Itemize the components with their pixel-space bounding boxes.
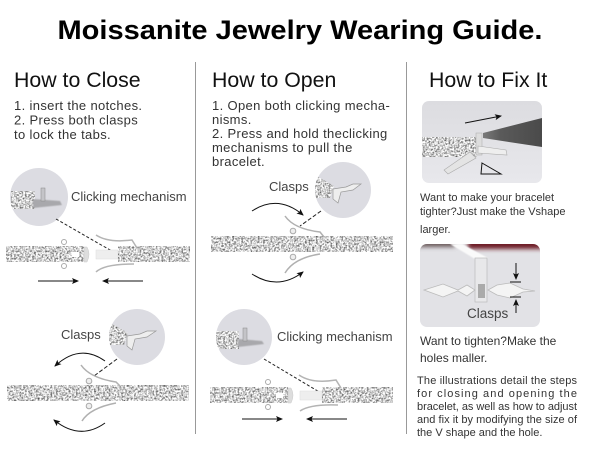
arrow: up [515,300,517,313]
text block: tighter instruction: tighter?Just make the Vshape [420,206,566,218]
text block: opening steps: nisms. [212,112,252,127]
bracelet: open bottom [210,375,393,411]
text block: opening steps: bracelet. [212,154,265,169]
text block: tighter instruction: larger. [420,224,451,236]
icon: clicking mechanism detail circle [10,168,68,226]
label: clasps: Clasps [269,179,309,194]
label: clasps: Clasps [467,306,509,321]
text block: tighter instruction: Want to make your bracelet [420,192,554,204]
text block: illustration note: bracelet, as well as how to adjust [417,401,577,413]
text block: opening steps: 1. Open both clicking mecha- [212,98,390,113]
leader line [264,359,321,393]
arrow: left [307,418,347,420]
icon: clasp detail circle [109,309,165,365]
label: clicking mechanism: Clicking mechanism [71,189,187,204]
text block: closing steps: to lock the tabs. [14,127,111,142]
text block: illustration note: for closing and opening the [417,388,577,400]
leader line [94,359,117,376]
panel: how to close [6,68,190,431]
photo: pliers bending clasp [422,101,542,183]
label: clicking mechanism: Clicking mechanism [277,329,393,344]
column divider 1 [195,62,196,434]
heading: how to close: How to Close [14,68,141,92]
arrow: upper curve [252,203,303,215]
leader line [300,211,321,226]
icon: clicking mechanism detail circle [216,309,272,365]
arrow: right [38,280,78,282]
text block: opening steps: mechanisms to pull the [212,140,353,155]
text block: illustration note: and fix it by modifying the size of [417,414,578,426]
photo: clasp holes [420,244,540,327]
text block: closing steps: 2. Press both clasps [14,112,138,128]
arrow: right [242,418,282,420]
text block: opening steps: 2. Press and hold theclicking [212,126,388,141]
heading: how to open: How to Open [212,68,336,92]
arrow: pull direction [465,116,501,123]
leader line [56,219,117,254]
text block: tighten instruction: Want to tighten?Make the [420,334,557,348]
column divider 2 [406,62,407,434]
title: Moissanite Jewelry Wearing Guide. [58,15,542,45]
arrow: down [515,263,517,279]
bracelet: closed [211,216,393,273]
label: clasps: Clasps [61,327,101,342]
bracelet: open top [6,235,190,272]
text block: illustration note: The illustrations detail the steps [417,375,578,387]
text block: illustration note: the V shape and the hole. [417,427,542,439]
text block: tighten instruction: holes maller. [420,351,487,365]
icon: V angle [481,163,501,174]
arrow: upper curve [55,353,105,366]
panel: how to open [210,68,393,419]
text block: closing steps: 1. insert the notches. [14,98,142,113]
icon: clasp detail circle [315,162,371,218]
arrow: lower curve [252,272,303,282]
heading: how to fix it: How to Fix It [429,68,547,92]
panel: how to fix it [415,68,578,439]
arrow: lower curve [54,420,105,431]
arrow: left [103,280,143,282]
bracelet: closed [7,365,189,421]
